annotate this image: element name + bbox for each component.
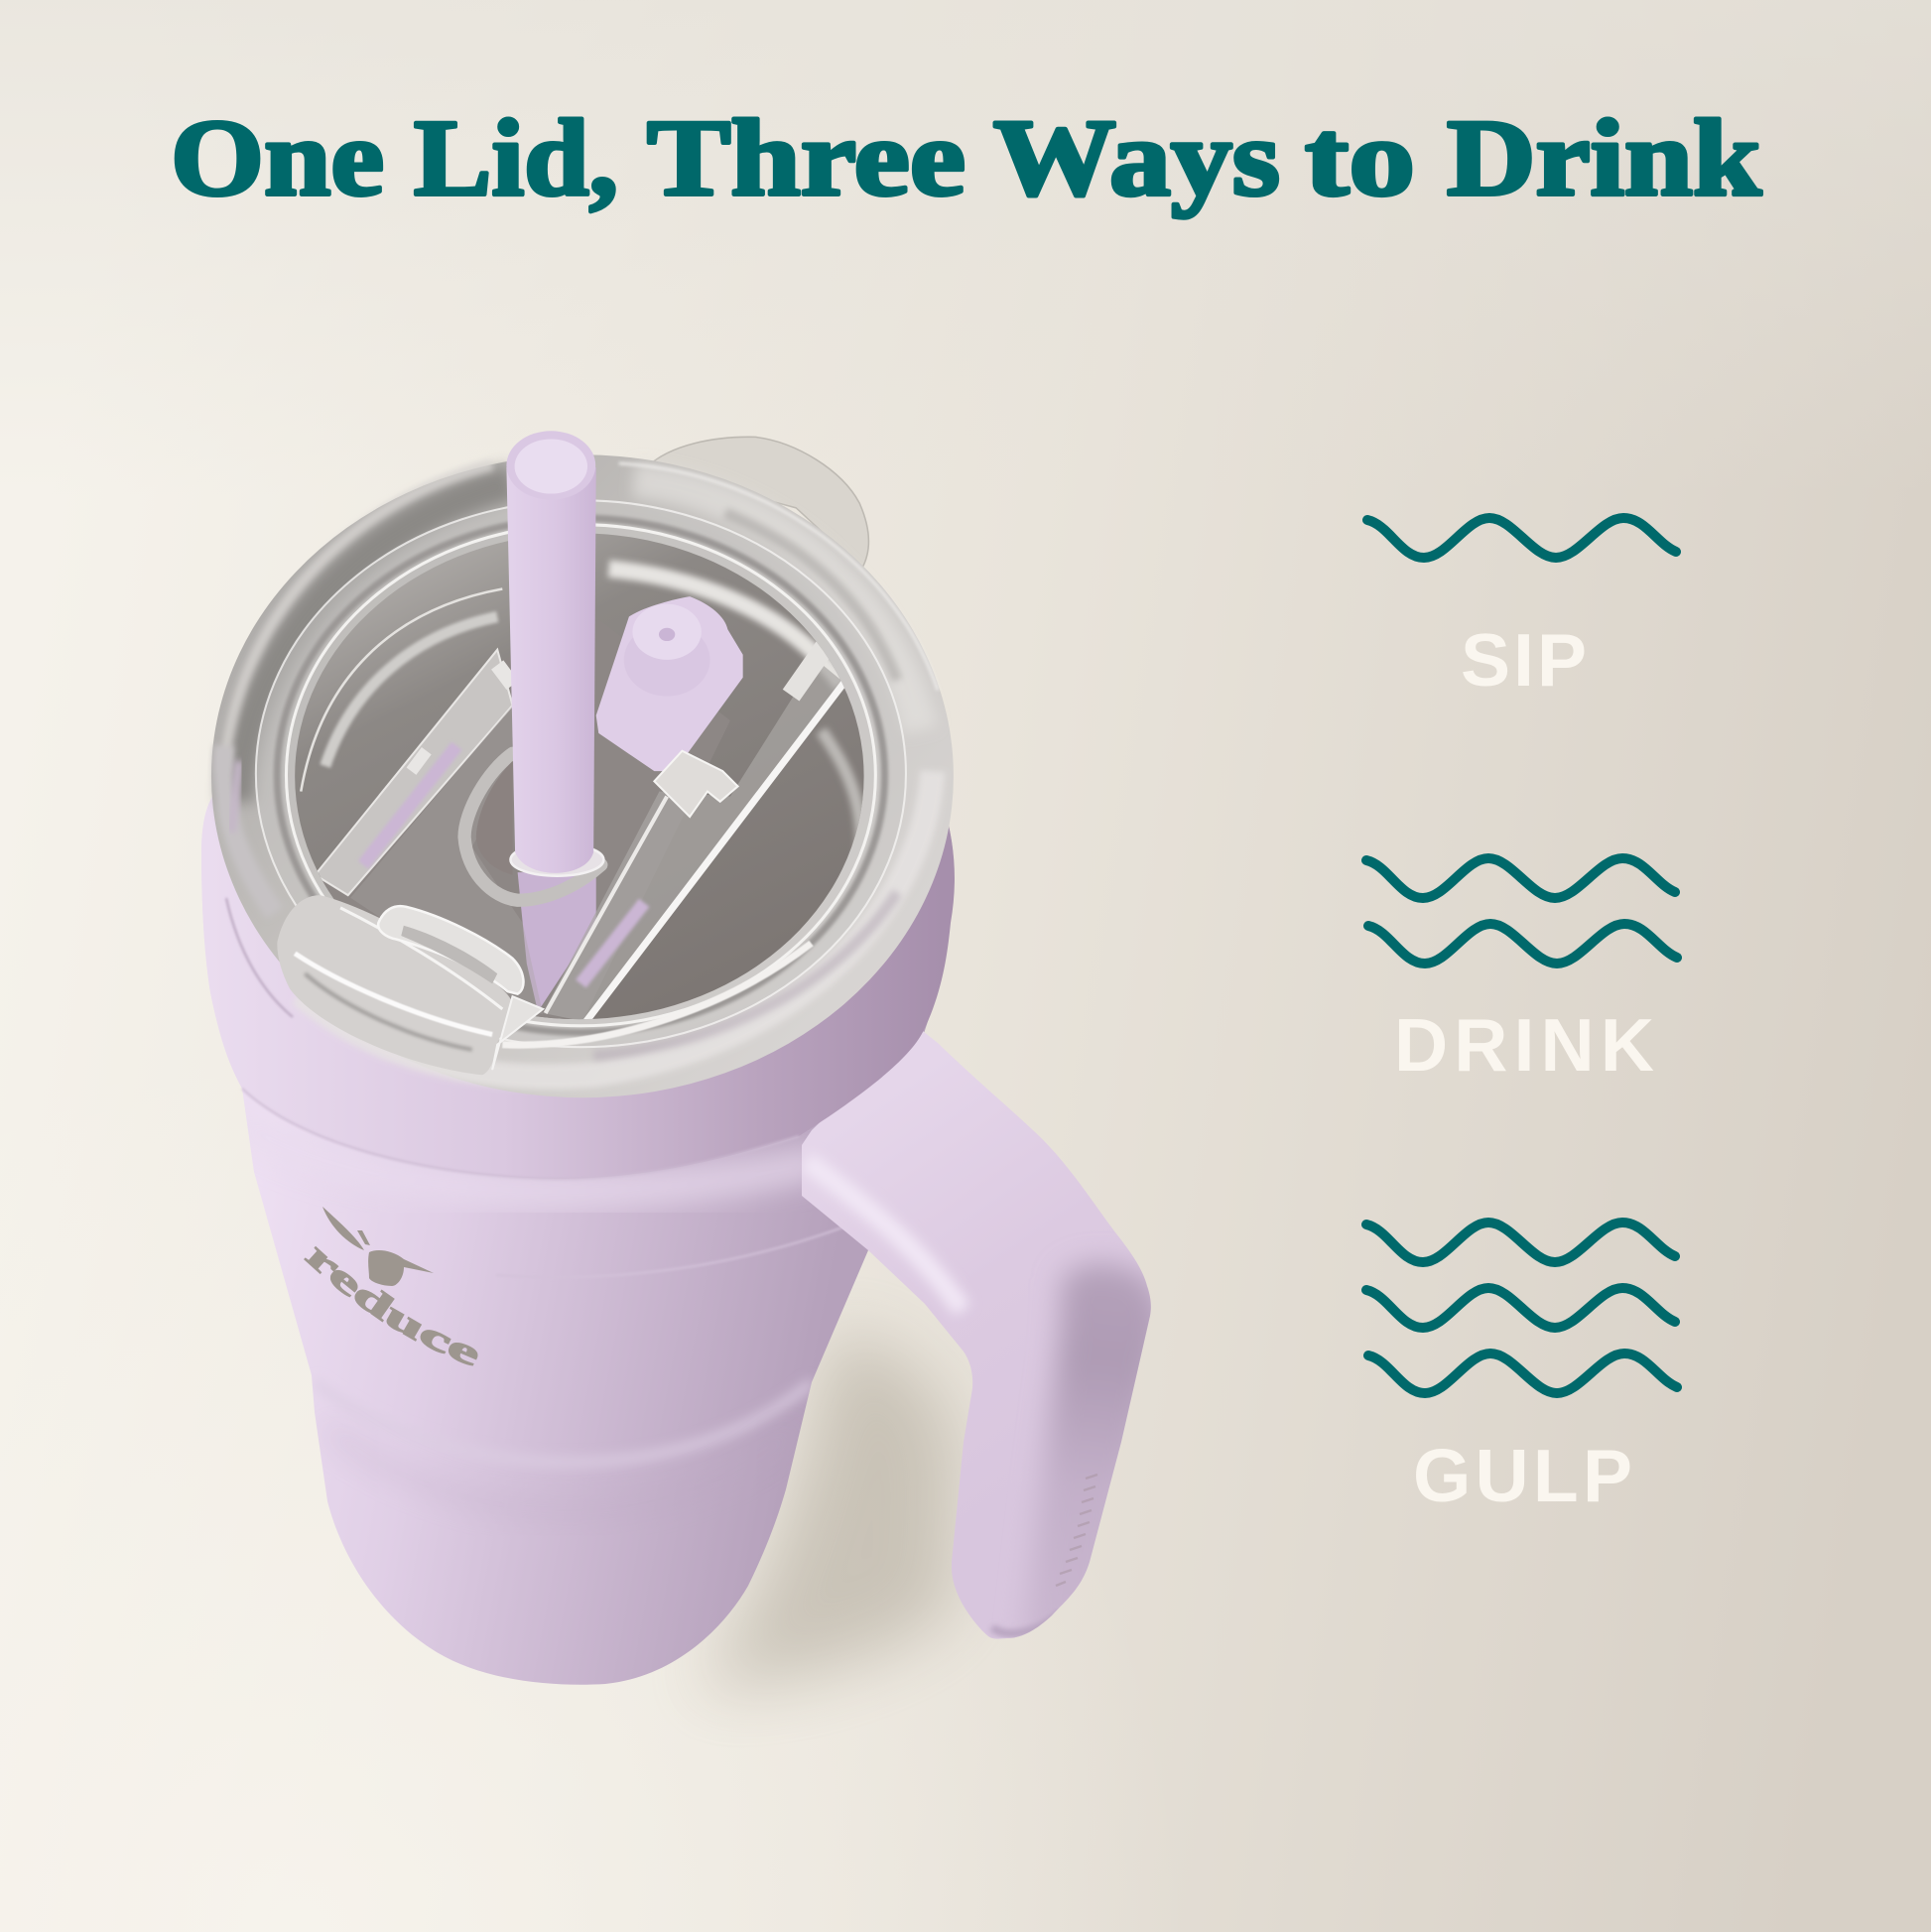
lid floor [295,533,864,1019]
logo wordmark: reduce [304,1246,478,1365]
flip tab hinge [492,996,543,1070]
rim shading: glass reflections [223,463,938,1077]
lid [211,431,954,1097]
logo leaf [322,1207,364,1250]
sip label: SIP [1461,618,1587,702]
straw [506,431,596,873]
title: Ways [993,97,1280,218]
channel glass [350,706,543,1014]
central channel [319,753,714,1019]
title [171,97,1762,218]
drink option [1366,858,1677,1087]
floor ring highlights [301,569,861,893]
sip option [1367,518,1676,702]
body [201,794,954,1685]
title: Lid, [414,97,618,218]
reflected straw [518,872,596,1011]
drink wave icon [1366,858,1677,964]
sip wave icon [1367,518,1676,558]
gulp option [1366,1223,1677,1517]
title: One [171,97,384,218]
handle [802,1027,1166,1647]
drink label: DRINK [1394,1003,1654,1087]
stopper [596,596,743,771]
cast shadow [695,1330,958,1687]
tumbler illustration [201,431,1151,1709]
left slide bar [316,650,513,895]
logo [304,1207,478,1365]
slider clip [654,751,738,817]
lid sip tab [647,437,868,569]
lid front lip [502,944,812,1045]
handle engraving [1056,1475,1097,1586]
front flip tab [277,895,543,1075]
neck band [201,794,955,1179]
title: Three [647,97,966,218]
title: to [1305,97,1415,218]
right slide bar [543,660,844,1022]
flip tab seal [378,906,523,994]
straw opening [464,753,603,900]
title: Drink [1447,97,1762,218]
gulp label: GULP [1413,1434,1632,1517]
logo bird mark [368,1250,434,1286]
lid outer rim [211,454,954,1097]
handle side facet [1026,1253,1151,1623]
lid inner wall rings [256,500,906,1047]
gulp wave icon [1366,1223,1677,1393]
